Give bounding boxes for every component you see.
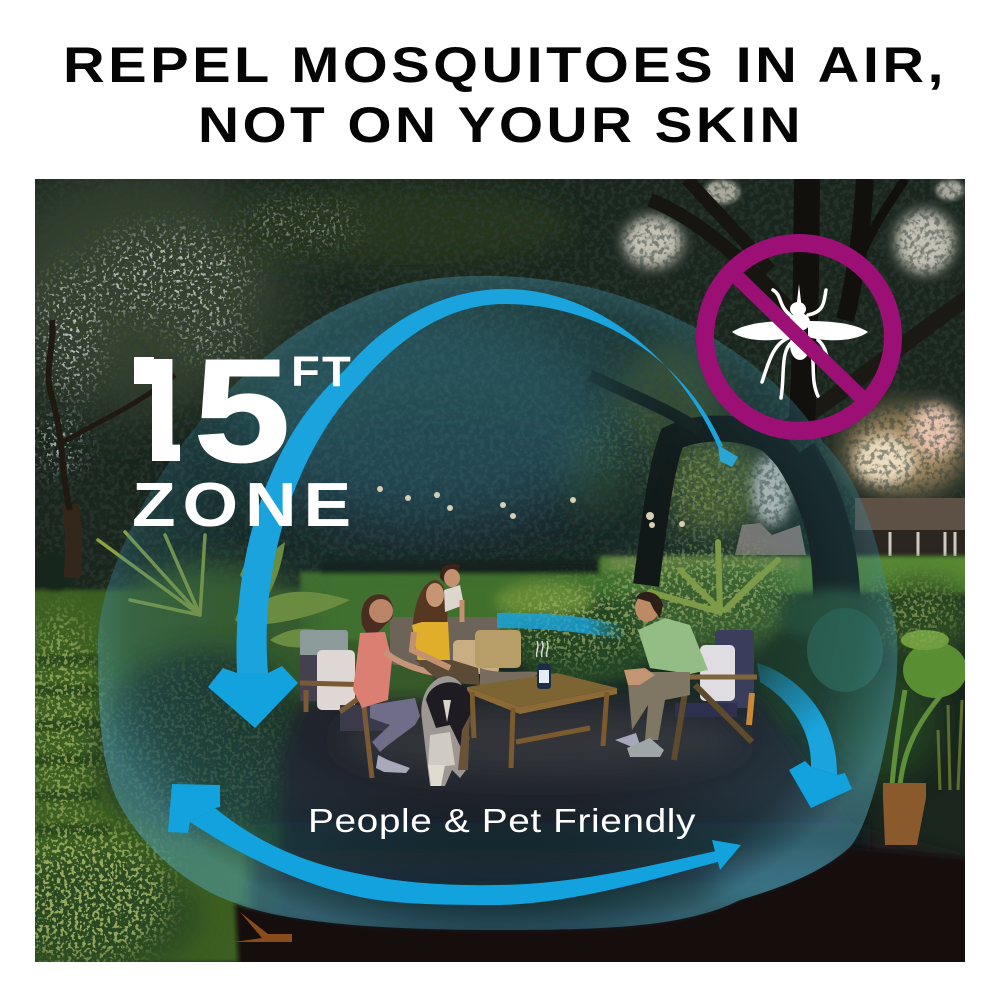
double-headed arrow along the ground [168, 784, 741, 905]
garden plants right [495, 565, 980, 790]
title: REPEL MOSQUITOES IN AIR, [63, 37, 947, 93]
bright foliage texture [35, 405, 965, 962]
girl in pink [353, 594, 442, 773]
oak trunks and branches [49, 179, 970, 600]
arrow: curving down on the right [757, 663, 852, 808]
arrowhead: small at tree [718, 445, 738, 467]
sofa [390, 617, 540, 690]
man in green shirt [615, 592, 708, 757]
string lights [377, 486, 685, 528]
coffee table [467, 673, 617, 768]
palm fronds right [650, 542, 778, 612]
zone label: 15 FT ZONE: FT [291, 348, 353, 396]
boy behind sofa [440, 564, 464, 622]
arrow: lamp band, passes behind the man [497, 613, 625, 640]
dark foliage texture [35, 179, 965, 599]
patio floor and foreground darkness [234, 700, 985, 985]
right armchair [673, 630, 757, 760]
woman in yellow [412, 580, 480, 685]
no-mosquito badge [705, 243, 893, 431]
garden plants left [35, 530, 350, 961]
icon: mosquito [732, 284, 868, 398]
seating group [300, 564, 757, 786]
arrowhead: down [208, 666, 298, 728]
prohibition bar [737, 277, 862, 398]
zone label: 15 FT ZONE [134, 356, 350, 526]
title [63, 37, 947, 153]
arc arrow: overhead from tree down to left [208, 289, 738, 728]
zone label: 15 FT ZONE: ZONE [132, 471, 358, 540]
lawns [30, 552, 970, 962]
collie dog [421, 676, 470, 786]
zone label: 15 FT ZONE: 1 [56, 329, 226, 492]
large leaf plant hiding trunk base [780, 589, 890, 692]
title: NOT ON YOUR SKIN [198, 97, 804, 153]
terracotta planter [883, 783, 926, 845]
zone label: 15 FT ZONE: 5 [194, 329, 290, 492]
protective dome [90, 270, 910, 940]
repeller device [537, 641, 551, 689]
distant houses [735, 498, 965, 558]
left armchair [300, 630, 390, 778]
tree canopy and sky [35, 179, 965, 548]
caption: People & Pet Friendly: People & Pet Friendly [308, 802, 696, 839]
sunset glow [752, 404, 965, 526]
